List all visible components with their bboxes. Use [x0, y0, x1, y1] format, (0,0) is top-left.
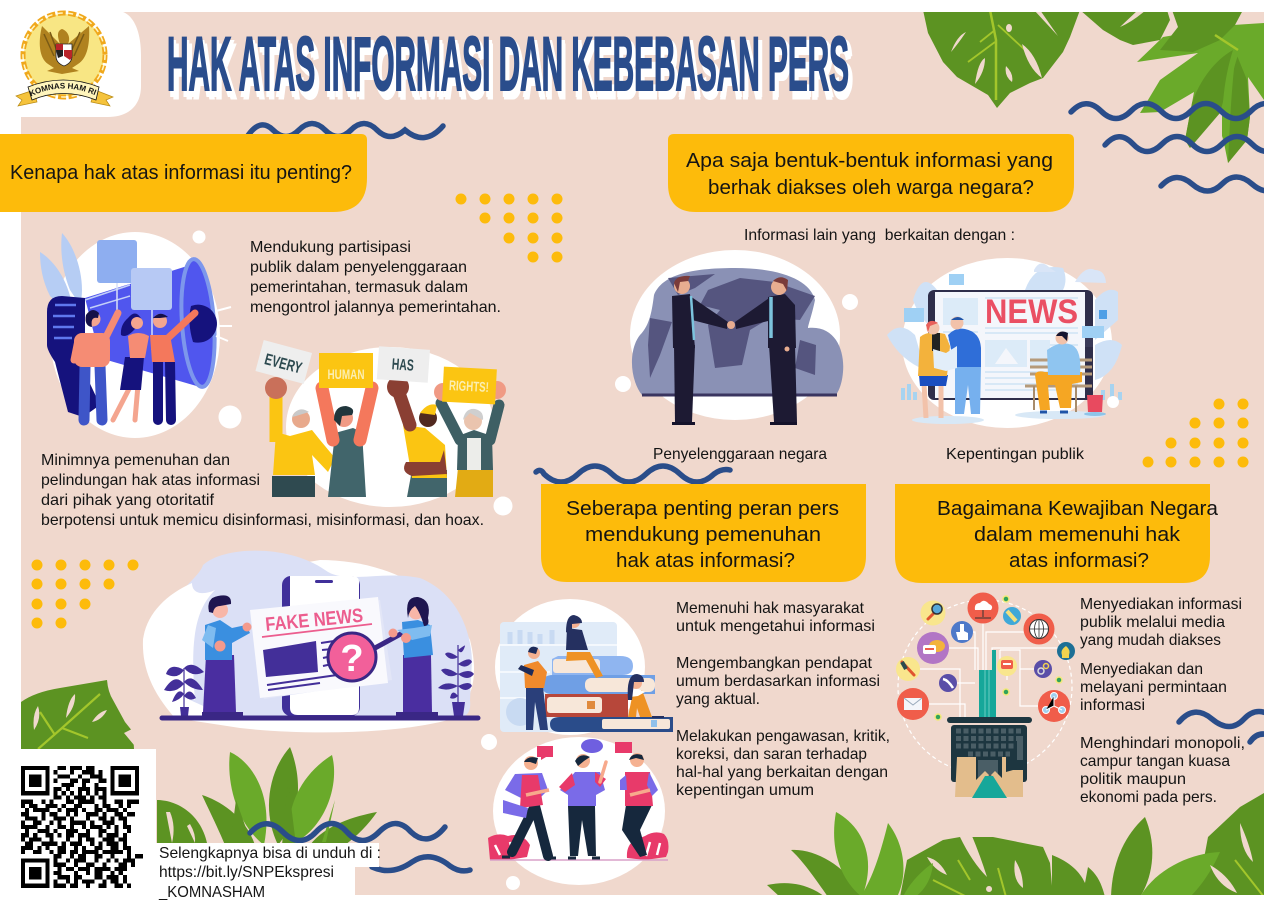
- heading: Bagaimana Kewajiban Negara: [895, 484, 1219, 583]
- laptop: [947, 717, 1032, 798]
- wavy line behind first heading: [247, 124, 443, 138]
- logo: Komnas HAM emblem: KOMNAS HAM RI: [30, 82, 96, 96]
- seated reader on top: [566, 615, 603, 678]
- sign: RIGHTS: [442, 367, 497, 404]
- text: download link: [158, 845, 381, 901]
- shelf line: [162, 716, 478, 720]
- text: peran pers: Mengembangkan pendapat: [676, 655, 873, 672]
- text: Mendukung partisipasi: [250, 239, 501, 316]
- white panels behind QR and link: [0, 749, 1280, 905]
- text: kewajiban negara: politik maupun: [1080, 771, 1186, 788]
- text: peran pers: Memenuhi hak masyarakat: [676, 600, 865, 617]
- magnifying glass: ?: [340, 638, 364, 680]
- text: Minimnya pemenuhan: dari pihak yang otoritatif: [41, 492, 215, 509]
- text: download link: https://bit.ly/SNPEkspresi: [159, 864, 334, 881]
- text: kewajiban negara: melayani permintaan: [1080, 679, 1227, 696]
- foliage: bottom right leaves: [767, 793, 1264, 897]
- person one: [265, 377, 335, 497]
- text: Minimnya pemenuhan: Minimnya pemenuhan dan: [41, 452, 230, 469]
- text: Minimnya pemenuhan: pelindungan hak atas informasi: [41, 472, 260, 489]
- text: peran pers: koreksi, dan saran terhadap: [676, 746, 867, 763]
- text: Mendukung partisipasi: publik dalam penyelenggaraan: [250, 259, 467, 276]
- sign: EVERY: [255, 340, 312, 384]
- text: kewajiban negara: informasi: [1080, 697, 1145, 714]
- wavy line behind third heading: [536, 466, 730, 482]
- NEWS headline: NEWS: [985, 293, 1078, 331]
- text: kewajiban negara: Menyediakan informasi: [1080, 596, 1242, 613]
- businessman right: [735, 277, 797, 425]
- wavy line decorations: [1071, 104, 1280, 742]
- illustration: handshake over world map: [615, 250, 858, 425]
- text: peran pers: [676, 600, 890, 799]
- text: Minimnya pemenuhan: [41, 452, 484, 529]
- illustration: readers on books: [481, 599, 673, 750]
- text: kewajiban negara: ekonomi pada pers.: [1080, 789, 1217, 806]
- sign: RIGHTS: RIGHTS!: [449, 377, 489, 395]
- sign: HUMAN: HUMAN: [328, 366, 364, 382]
- illustration: human rights crowd: [255, 340, 512, 516]
- wavy lines over bottom plant: [250, 824, 470, 871]
- heading: Bagaimana Kewajiban Negara: Bagaimana Kewajiban Negara: [937, 497, 1219, 520]
- seated reader right: [628, 674, 664, 717]
- heading: Seberapa penting peran pers: [541, 484, 866, 582]
- heading: Kenapa hak atas informasi itu penting: Kenapa hak atas informasi itu penting?: [10, 161, 352, 184]
- ground: [912, 416, 984, 424]
- text: Mendukung partisipasi: pemerintahan, termasuk dalam: [250, 279, 468, 296]
- person two: [322, 388, 372, 497]
- text: kewajiban negara: publik melalui media: [1080, 614, 1225, 631]
- text: peran pers: umum berdasarkan informasi: [676, 673, 880, 690]
- plants: [164, 645, 474, 716]
- label: Kepentingan publik: Kepentingan publik: [946, 446, 1085, 463]
- person four: [441, 403, 499, 497]
- newspaper: FAKE NEWS: [264, 605, 364, 636]
- sign: HAS: [377, 346, 430, 383]
- icon circles: [896, 592, 1075, 722]
- book stack: [542, 656, 673, 732]
- heading: Apa saja bentuk-bentuk informasi: [668, 134, 1074, 212]
- text: Mendukung partisipasi: mengontrol jalannya pemerintahan.: [250, 299, 501, 316]
- yellow dots: left: [32, 560, 138, 628]
- label: Penyelenggaraan negara: Penyelenggaraan negara: [653, 446, 827, 463]
- heading: Apa saja bentuk-bentuk informasi: berhak diakses oleh warga negara?: [708, 176, 1034, 199]
- title: [167, 22, 853, 115]
- person left: [502, 756, 556, 858]
- logo: Komnas HAM emblem: [15, 10, 114, 106]
- heading: Seberapa penting peran pers: Seberapa penting peran pers: [566, 497, 839, 520]
- illustration: news: [887, 258, 1122, 428]
- QR code: [21, 768, 143, 886]
- yellow dots: top centre: [456, 194, 562, 262]
- text: peran pers: hal-hal yang berkaitan dengan: [676, 764, 888, 781]
- person middle: [559, 754, 606, 858]
- man on bench: [1025, 332, 1092, 412]
- illustration: technology tree and laptop: [896, 592, 1075, 798]
- heading: Bagaimana Kewajiban Negara: atas informasi?: [1009, 549, 1149, 572]
- text: kewajiban negara: campur tangan kuasa: [1080, 753, 1230, 770]
- text: peran pers: yang aktual.: [676, 691, 760, 708]
- text: peran pers: Melakukan pengawasan, kritik,: [676, 728, 890, 745]
- text: Minimnya pemenuhan: berpotensi untuk memicu disinformasi, misinformasi, dan hoax.: [41, 512, 484, 529]
- foliage: top right leaves: [923, 10, 1264, 163]
- man on left: [202, 595, 252, 717]
- foliage: bottom plant: [157, 747, 377, 845]
- sign: HUMAN: [319, 353, 373, 388]
- text: Informasi lain yang berkaitan dengan: Informasi lain yang berkaitan dengan :: [744, 227, 1015, 244]
- heading: Kenapa hak atas informasi itu penting: [0, 134, 367, 212]
- heading: Seberapa penting peran pers: hak atas informasi?: [616, 549, 795, 572]
- illustration: people discussing: [488, 737, 668, 890]
- illustration: megaphone and protesters: [40, 230, 242, 438]
- heading: Bagaimana Kewajiban Negara: dalam memenuhi hak: [974, 523, 1181, 546]
- heading: Apa saja bentuk-bentuk informasi: Apa saja bentuk-bentuk informasi yang: [686, 149, 1053, 172]
- heading: Seberapa penting peran pers: mendukung pemenuhan: [585, 523, 821, 546]
- yellow dots: right: [1142, 398, 1248, 468]
- person three: [387, 376, 447, 497]
- foliage: left leaf above QR: [21, 680, 134, 749]
- magnifying glass: [328, 630, 408, 681]
- sign: EVERY: EVERY: [263, 351, 304, 378]
- person right: [620, 753, 658, 857]
- text: kewajiban negara: Menyediakan dan: [1080, 661, 1203, 678]
- text: download link: Selengkapnya bisa di unduh di :: [159, 845, 381, 862]
- text: peran pers: untuk mengetahui informasi: [676, 618, 875, 635]
- text: kewajiban negara: [1080, 596, 1245, 806]
- text: peran pers: kepentingan umum: [676, 782, 814, 799]
- illustration: fake news: [143, 551, 478, 732]
- standing reader: [518, 647, 548, 730]
- text: Mendukung partisipasi: Mendukung partisipasi: [250, 239, 411, 256]
- woman on right: [388, 597, 438, 717]
- businessman left: [672, 276, 728, 425]
- text: kewajiban negara: Menghindari monopoli,: [1080, 735, 1245, 752]
- text: kewajiban negara: yang mudah diakses: [1080, 632, 1221, 649]
- couple with newspaper: [918, 316, 981, 418]
- newspaper: [250, 597, 388, 698]
- text: download link: _KOMNASHAM: [158, 884, 265, 901]
- sign: HAS: HAS: [391, 356, 415, 375]
